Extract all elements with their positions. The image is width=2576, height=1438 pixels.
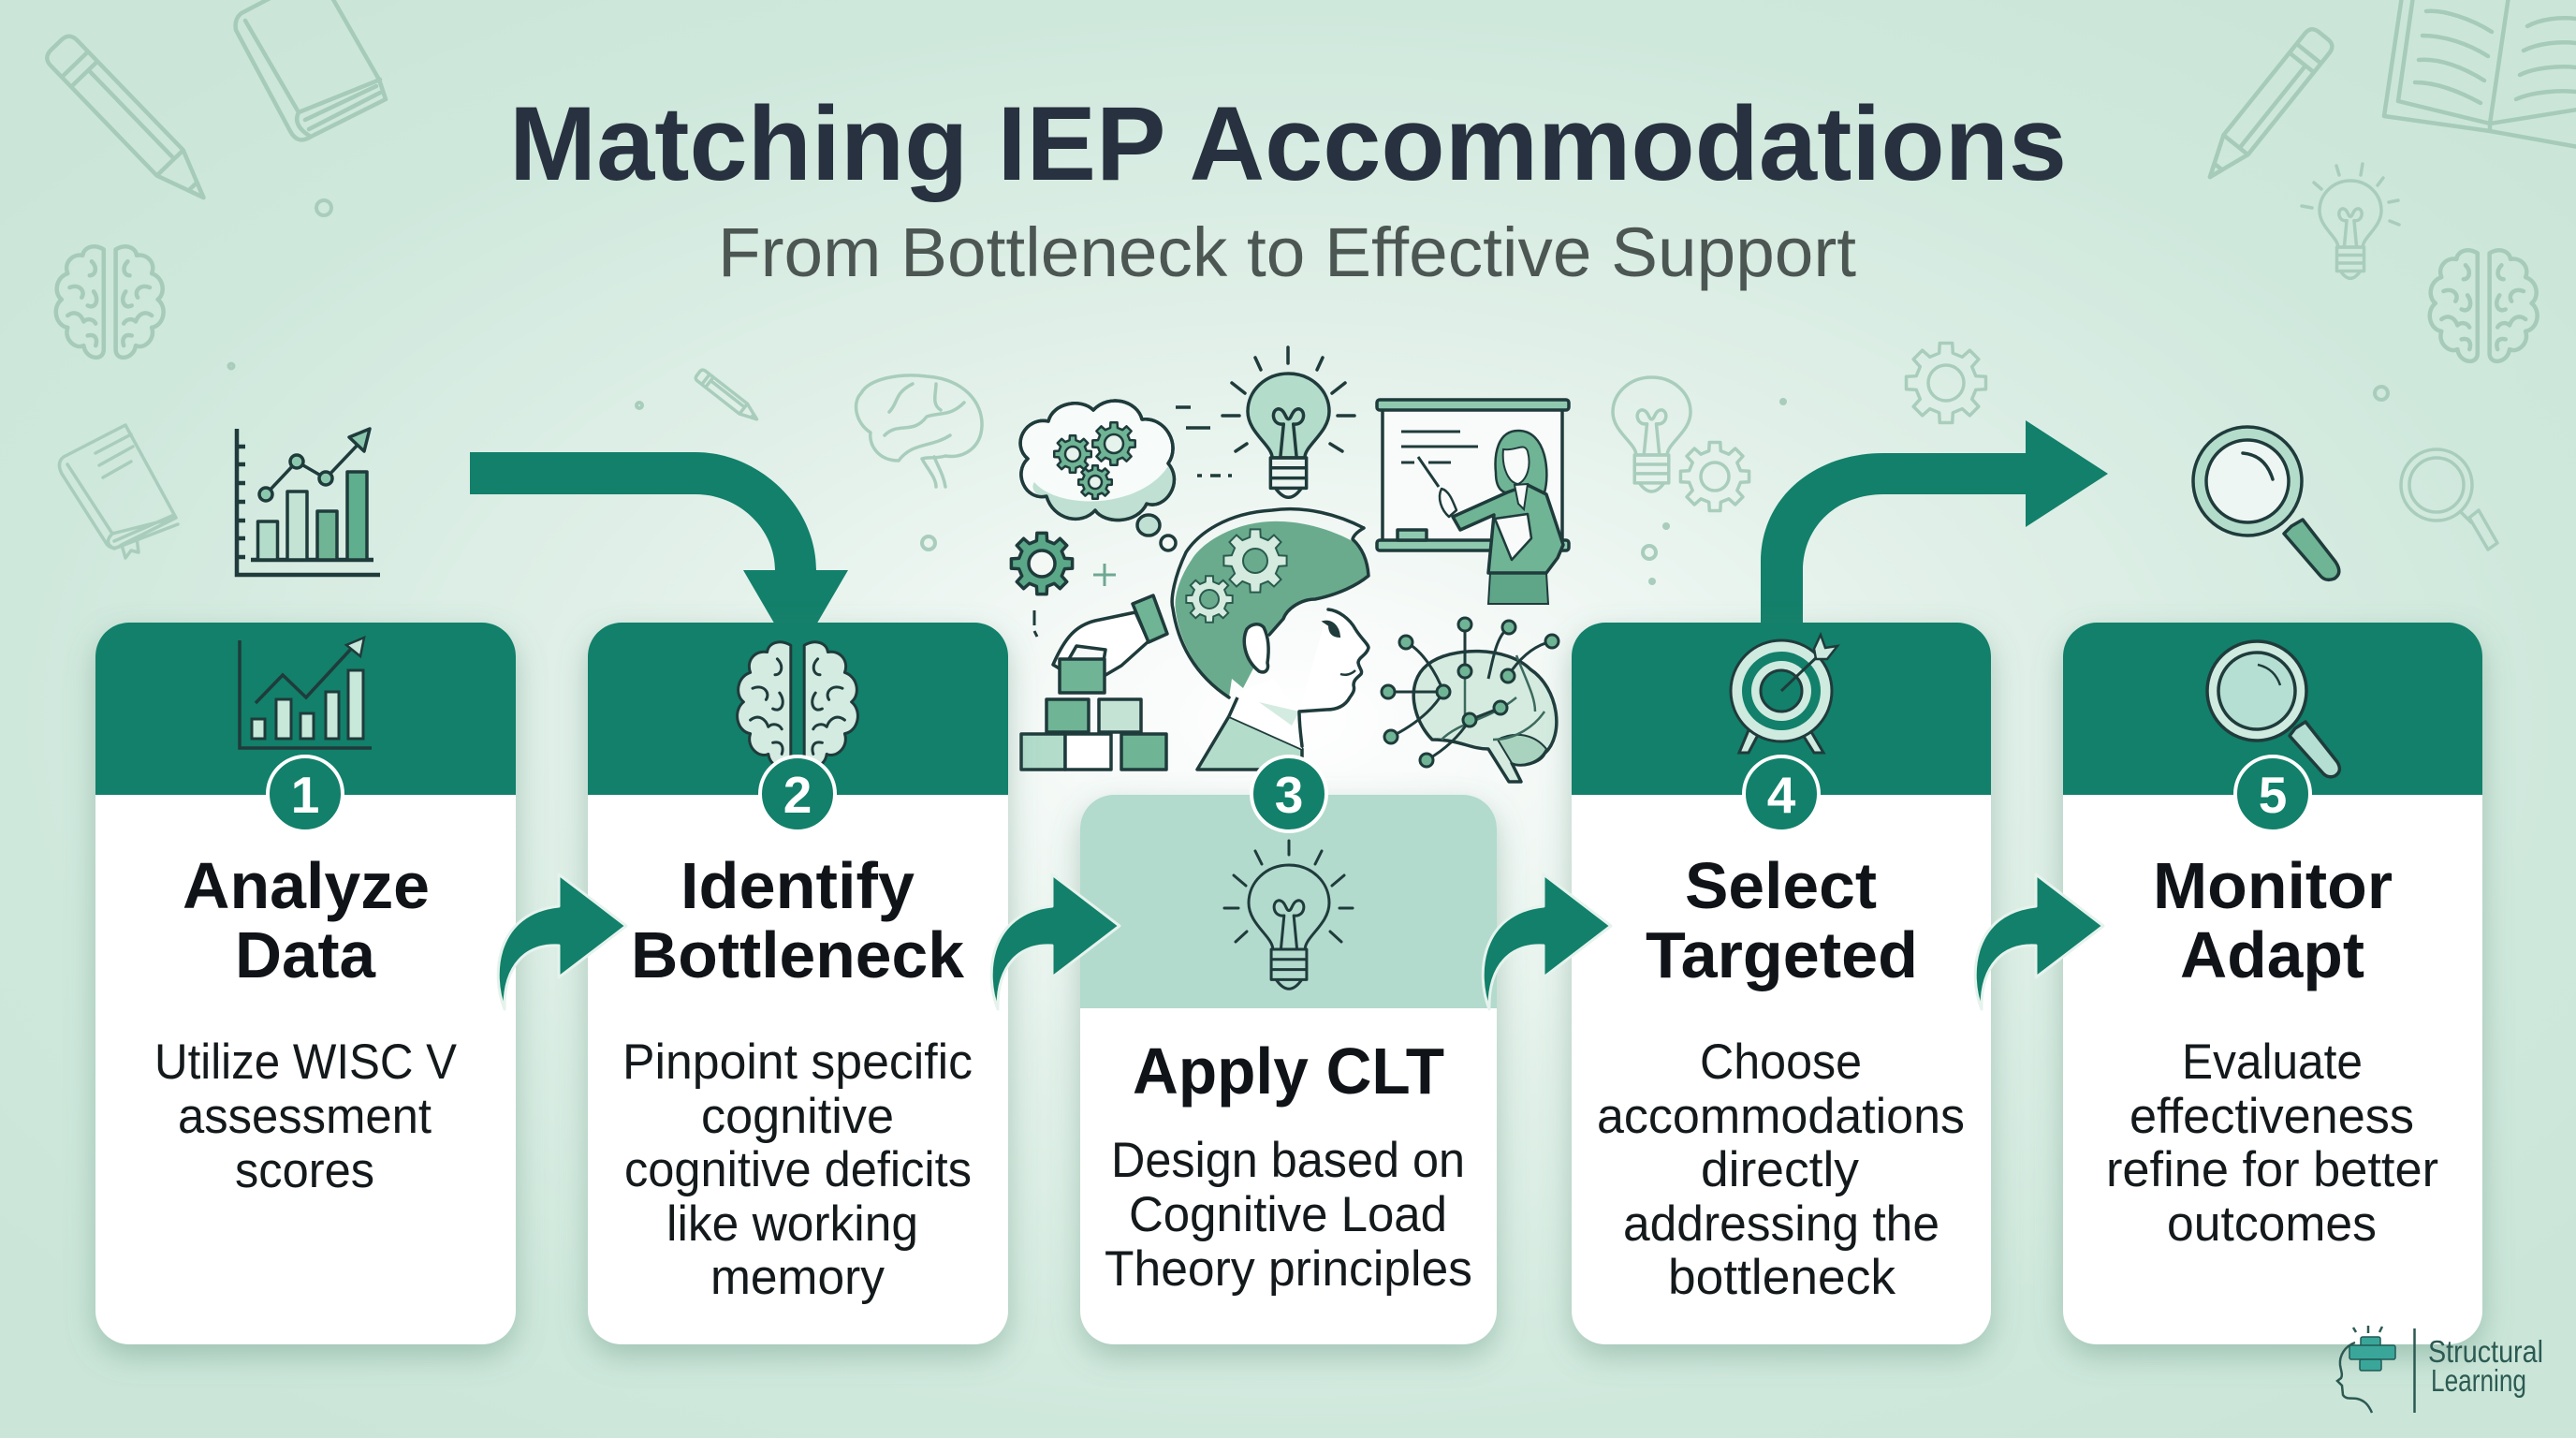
description: cognitive deficits bbox=[624, 1142, 972, 1197]
step number 5 bbox=[2235, 756, 2310, 831]
icon: brain bbox=[738, 642, 857, 768]
description: cognitive bbox=[701, 1089, 894, 1144]
subtitle: From Bottleneck to Effective Support bbox=[718, 213, 1856, 291]
heading: Select bbox=[1685, 849, 1877, 922]
description: Utilize WISC V bbox=[154, 1034, 458, 1090]
icon: bulb bbox=[1224, 841, 1353, 989]
description: addressing the bbox=[1623, 1196, 1939, 1252]
icon: chart bbox=[240, 638, 372, 748]
heading: Monitor bbox=[2153, 849, 2393, 922]
description: assessment bbox=[178, 1089, 432, 1144]
step number 1: 1 bbox=[291, 766, 319, 824]
step number 1 bbox=[268, 756, 343, 831]
panel: step 1 analyze data bbox=[95, 623, 516, 1344]
description: Cognitive Load bbox=[1129, 1187, 1447, 1242]
heading bbox=[2153, 849, 2393, 991]
decorative icon: top left book bbox=[236, 0, 386, 139]
light bulb bbox=[1222, 347, 1354, 497]
decorative icon: top right pencil bbox=[2198, 26, 2335, 187]
arrow: select targeted to monitor adapt bbox=[1761, 420, 2108, 637]
boy with gears in head bbox=[1172, 509, 1368, 770]
description: Pinpoint specific bbox=[622, 1034, 973, 1090]
arrow: step 1 to step 2 bbox=[498, 874, 626, 1009]
whiteboard and teacher bbox=[1377, 400, 1569, 604]
heading bbox=[183, 849, 430, 991]
panel: step 4 select targeted bbox=[1572, 623, 1991, 1344]
description: outcomes bbox=[2167, 1196, 2377, 1252]
description bbox=[622, 1034, 973, 1305]
decorative icon: open book bbox=[2384, 0, 2576, 148]
step number 4 bbox=[1744, 756, 1819, 831]
step number 5: 5 bbox=[2259, 766, 2287, 824]
arrow: step 4 to step 5 bbox=[1975, 874, 2103, 1009]
description: Design based on bbox=[1111, 1133, 1465, 1188]
description: memory bbox=[710, 1250, 885, 1305]
decorative icon: right brain bbox=[2430, 250, 2538, 361]
decorative icon: faded magnifier bbox=[2401, 449, 2497, 550]
step number 4: 4 bbox=[1767, 766, 1796, 824]
decorative icon: gear beside bulb bbox=[1680, 442, 1749, 511]
panel: step 3 apply CLT bbox=[1080, 756, 1497, 1344]
description: accommodations bbox=[1597, 1089, 1965, 1144]
description: directly bbox=[1701, 1142, 1859, 1197]
panel: step 5 monitor adapt bbox=[2063, 623, 2482, 1344]
description: scores bbox=[235, 1143, 374, 1198]
icon: magnifier bbox=[2207, 641, 2339, 777]
description: refine for better bbox=[2106, 1142, 2438, 1197]
arrow: step 3 to step 4 bbox=[1483, 874, 1611, 1009]
logo text: Learning bbox=[2431, 1363, 2526, 1398]
decorative dots bbox=[228, 200, 2388, 583]
heading: Analyze bbox=[183, 849, 430, 922]
thought cloud with gears bbox=[1020, 401, 1176, 550]
network brain bbox=[1382, 618, 1559, 782]
description: Evaluate bbox=[2182, 1034, 2363, 1090]
gear and plus bbox=[1011, 407, 1232, 637]
heading bbox=[631, 849, 964, 991]
heading bbox=[1646, 849, 1918, 991]
central illustration bbox=[1011, 347, 1569, 782]
decorative icon: small top right bulb bbox=[2302, 164, 2399, 278]
decorative icon: top gear bbox=[1907, 344, 1985, 422]
logo mark bbox=[2337, 1326, 2395, 1413]
icon: target bbox=[1731, 635, 1837, 753]
description: like working bbox=[666, 1196, 918, 1252]
logo: Structural Learning bbox=[2337, 1326, 2543, 1413]
heading: Data bbox=[235, 918, 376, 991]
description bbox=[2106, 1034, 2438, 1252]
arrow: step 2 to step 3 bbox=[991, 874, 1120, 1009]
arrow: analyze data to identify bottleneck bbox=[470, 452, 848, 660]
description bbox=[1597, 1034, 1965, 1305]
description: Choose bbox=[1700, 1034, 1862, 1090]
step number 3 bbox=[1251, 756, 1326, 831]
decorative icon: faded bulb bbox=[1613, 377, 1690, 492]
logo text: Structural bbox=[2428, 1334, 2543, 1369]
step number 2: 2 bbox=[783, 766, 812, 824]
heading: Targeted bbox=[1646, 918, 1918, 991]
heading: Identify bbox=[681, 849, 915, 922]
decorative icons: top left pencil bbox=[43, 32, 216, 211]
description: effectiveness bbox=[2130, 1089, 2414, 1144]
step number 2 bbox=[760, 756, 835, 831]
decorative icon: left brain bbox=[56, 246, 164, 358]
title: Matching IEP Accommodations bbox=[509, 85, 2067, 202]
description bbox=[1105, 1133, 1472, 1297]
heading: Adapt bbox=[2180, 918, 2364, 991]
heading: Apply CLT bbox=[1133, 1034, 1444, 1108]
logo text bbox=[2428, 1334, 2543, 1398]
description: bottleneck bbox=[1668, 1250, 1895, 1305]
decorative icon: lower left book bbox=[59, 425, 178, 558]
hand and blocks bbox=[1021, 595, 1167, 770]
icon: free magnifier bbox=[2193, 427, 2339, 580]
decorative icon: small pencil bbox=[695, 369, 761, 424]
description bbox=[154, 1034, 458, 1198]
step number 3: 3 bbox=[1275, 766, 1303, 824]
decorative icon: side brain bbox=[856, 375, 982, 487]
heading: Bottleneck bbox=[631, 918, 964, 991]
icon: free bar chart bbox=[237, 429, 380, 575]
description: Theory principles bbox=[1105, 1241, 1472, 1297]
panel: step 2 identify bottleneck bbox=[588, 623, 1008, 1344]
